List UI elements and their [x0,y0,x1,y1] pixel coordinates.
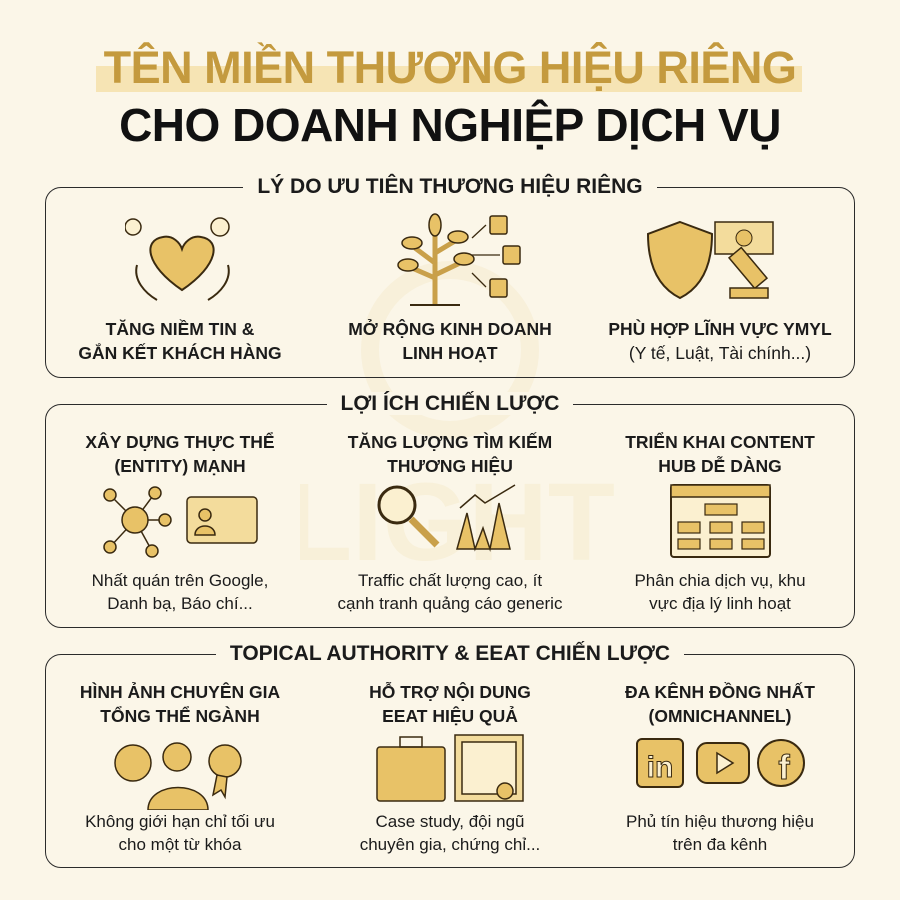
desc: hub: Phân chia dịch vụ, khu [634,571,806,590]
desc: hub [634,571,806,613]
heading: topical: TOPICAL AUTHORITY & EEAT CHIẾN LƯỢC [230,642,670,665]
desc: search: cạnh tranh quảng cáo generic [338,594,562,613]
title: TÊN MIỀN THƯƠNG HIỆU RIÊNG [104,42,796,93]
label: eeat: HỖ TRỢ NỘI DUNG [369,682,531,702]
desc: eeat [360,812,540,854]
text: col1: GẮN KẾT KHÁCH HÀNG [78,343,282,363]
label: expert [80,682,280,726]
desc: search: Traffic chất lượng cao, ít [358,571,542,590]
desc: expert: cho một từ khóa [119,835,241,854]
panel: topical [45,654,855,868]
text: col1: TĂNG NIỀM TIN & [106,319,254,339]
label: entity: (ENTITY) MẠNH [114,456,246,476]
desc: eeat: chuyên gia, chứng chỉ... [360,835,540,854]
icon: social: in [647,751,673,784]
label: expert: HÌNH ẢNH CHUYÊN GIA [80,682,280,702]
label: omnichannel: (OMNICHANNEL) [649,706,791,726]
desc: entity [92,571,268,613]
title [96,42,802,151]
label: eeat: EEAT HIỆU QUẢ [382,706,518,726]
text: col3: (Y tế, Luật, Tài chính...) [629,343,811,363]
label: omnichannel: ĐA KÊNH ĐỒNG NHẤT [625,682,815,702]
icon: tree [397,213,521,306]
text: col2: LINH HOẠT [402,343,498,363]
panel: loi ich [45,404,855,628]
label: expert: TỔNG THỂ NGÀNH [100,706,260,726]
icon: sitemap window [670,484,771,558]
text: col2: MỞ RỘNG KINH DOANH [348,319,552,339]
desc: hub: vực địa lý linh hoạt [649,594,791,613]
text: col2 [348,319,552,363]
text: col3 [608,319,832,363]
desc: entity: Danh bạ, Báo chí... [107,594,253,613]
label: content hub: HUB DỄ DÀNG [658,456,782,476]
label: search [348,432,552,476]
desc: eeat: Case study, đội ngũ [376,812,524,831]
icon: shield gavel [647,220,774,300]
desc: search [338,571,562,613]
icon: magnifier chart [378,484,516,552]
title: CHO DOANH NGHIỆP DỊCH VỤ [119,99,781,151]
panel: ly do [45,187,855,378]
label: search: TĂNG LƯỢNG TÌM KIẾM [348,432,552,452]
desc: omni: Phủ tín hiệu thương hiệu [626,812,814,831]
desc: expert: Không giới hạn chỉ tối ưu [85,812,275,831]
heading: loi ich: LỢI ÍCH CHIẾN LƯỢC [341,392,559,415]
label: content hub [625,432,815,476]
label: entity: XÂY DỰNG THỰC THỂ [85,432,275,452]
desc: omni [626,812,814,854]
desc: entity: Nhất quán trên Google, [92,571,268,590]
text: col1 [78,319,282,363]
icon: social: f [778,749,790,787]
icon: network + id card [103,486,258,558]
heading: ly do: LÝ DO ƯU TIÊN THƯƠNG HIỆU RIÊNG [257,175,643,198]
desc: omni: trên đa kênh [673,835,767,854]
label: omnichannel [625,682,815,726]
watermark logo [300,261,615,584]
label: eeat [369,682,531,726]
icon: social [636,738,805,788]
desc: expert [85,812,275,854]
icon: globe person badge [114,742,242,810]
label: search: THƯƠNG HIỆU [387,456,513,476]
text: col3: PHÙ HỢP LĨNH VỰC YMYL [608,319,832,339]
label: entity [85,432,275,476]
icon: hands heart [125,217,230,301]
label: content hub: TRIỂN KHAI CONTENT [625,432,815,452]
icon: briefcase certificate [376,734,524,802]
